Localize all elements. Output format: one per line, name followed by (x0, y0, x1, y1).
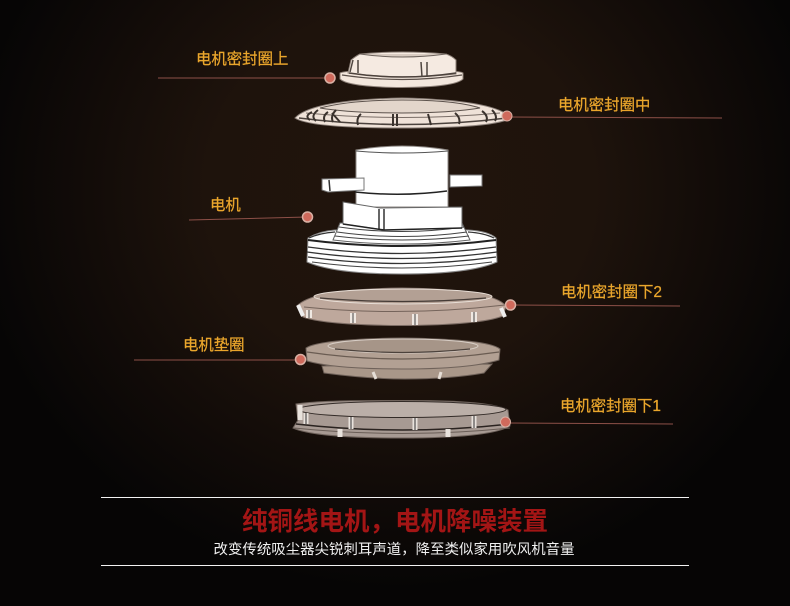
callout: motor seal upper: 电机密封圈上 (196, 50, 288, 68)
subheading: 改变传统吸尘器尖锐刺耳声道，降至类似家用吹风机音量 (214, 540, 574, 558)
callout: motor (189, 196, 312, 222)
part: motor seal upper (340, 52, 463, 88)
part: motor seal lower 2 (297, 288, 506, 326)
motor discs (307, 230, 497, 274)
top rule (101, 496, 689, 498)
motor washer (306, 338, 500, 379)
callout: motor washer (134, 336, 306, 364)
part: motor seal middle (295, 98, 511, 128)
part: motor seal lower 1 (293, 400, 510, 438)
motor block (343, 202, 462, 230)
callout: motor seal upper (158, 50, 335, 83)
part: motor (307, 146, 497, 274)
callout: motor seal middle: 电机密封圈中 (558, 96, 650, 114)
callout: motor seal lower 2: 电机密封圈下2 (561, 283, 662, 301)
headline: 纯铜线电机，电机降噪装置 (242, 508, 548, 536)
callout: motor washer: 电机垫圈 (183, 336, 245, 354)
callout: motor seal lower 1: 电机密封圈下1 (560, 397, 661, 415)
bottom rule (101, 564, 689, 566)
callout: motor seal lower 2 (506, 283, 680, 310)
callout: motor: 电机 (210, 196, 241, 214)
callout: motor seal lower 1 (500, 397, 673, 427)
motor body (356, 146, 448, 207)
callout: motor seal middle (502, 96, 722, 121)
motor side tabs (322, 178, 364, 192)
motor cone (333, 223, 470, 244)
